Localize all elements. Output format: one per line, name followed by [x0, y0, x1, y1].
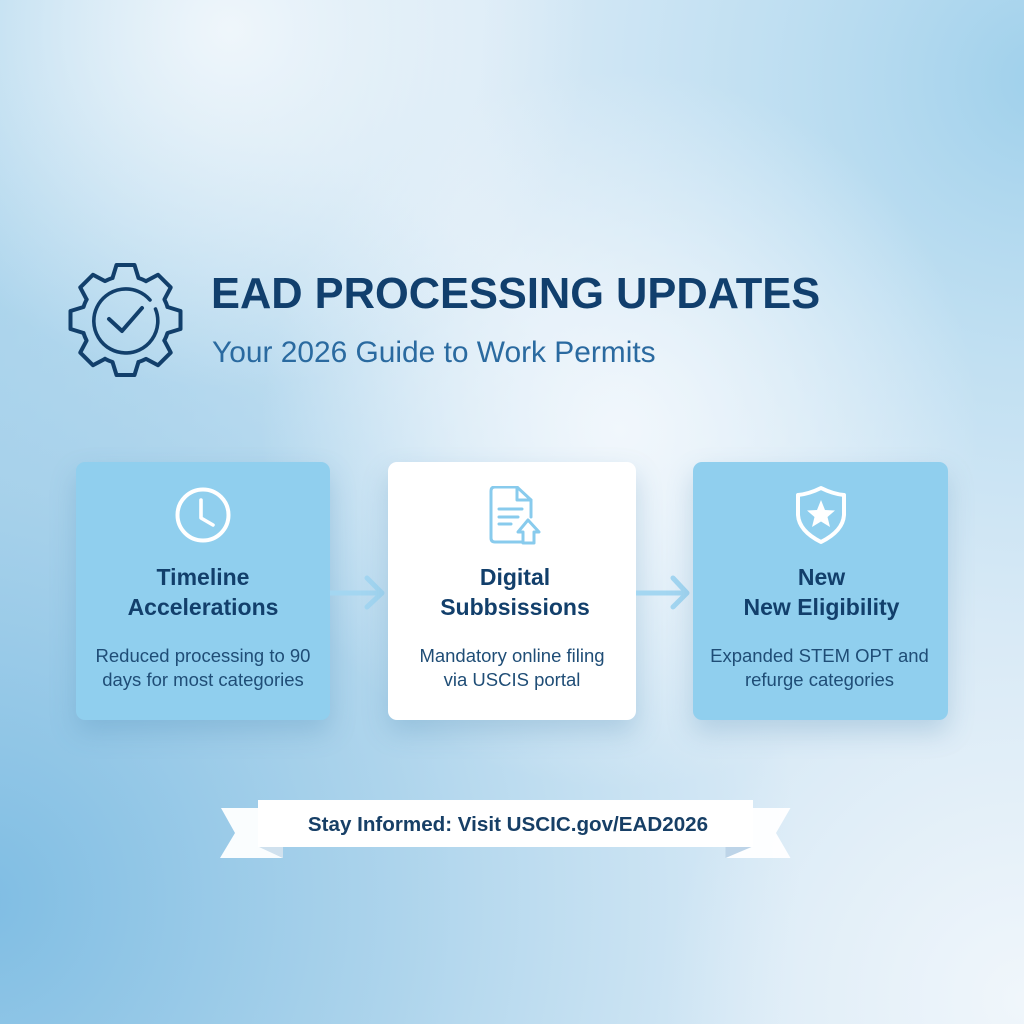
heading: digital subbsissions: Subbsissions — [440, 594, 590, 620]
text: eligibility description — [710, 645, 929, 690]
panel: timeline accelerations — [76, 462, 330, 720]
icon: gear with check mark — [68, 263, 182, 377]
heading: timeline accelerations — [128, 564, 278, 620]
heading: digital subbsissions: Digital — [480, 564, 550, 590]
text: timeline description — [96, 645, 310, 690]
text: eligibility description: refurge categories — [745, 668, 894, 690]
heading: new eligibility — [744, 564, 900, 620]
text: digital description: Mandatory online filing — [419, 645, 605, 666]
banner: stay informed — [220, 800, 790, 858]
text: digital description — [419, 645, 605, 690]
heading: timeline accelerations: Timeline — [157, 564, 249, 590]
panel: digital submissions — [388, 462, 636, 720]
banner text: Stay Informed: Visit USCIC.gov/EAD2026 — [308, 813, 708, 836]
text: digital description: via USCIS portal — [444, 668, 580, 690]
heading: new eligibility: New — [798, 564, 845, 590]
subtitle: Your 2026 Guide to Work Permits — [212, 336, 656, 369]
text: timeline description: days for most categories — [102, 668, 304, 690]
arrow: second to third panel — [636, 576, 690, 610]
heading: timeline accelerations: Accelerations — [128, 594, 278, 620]
heading: digital subbsissions — [440, 564, 590, 620]
panel: new eligibility — [693, 462, 948, 720]
arrow: first to second panel — [330, 576, 384, 610]
icon: shield with star — [796, 486, 846, 544]
text: eligibility description: Expanded STEM OPT and — [710, 645, 929, 666]
icon: clock — [176, 488, 230, 542]
title: EAD PROCESSING UPDATES — [211, 270, 820, 318]
text: timeline description: Reduced processing to 90 — [96, 645, 310, 666]
icon: document upload — [490, 486, 540, 544]
heading: new eligibility: New Eligibility — [744, 594, 899, 620]
